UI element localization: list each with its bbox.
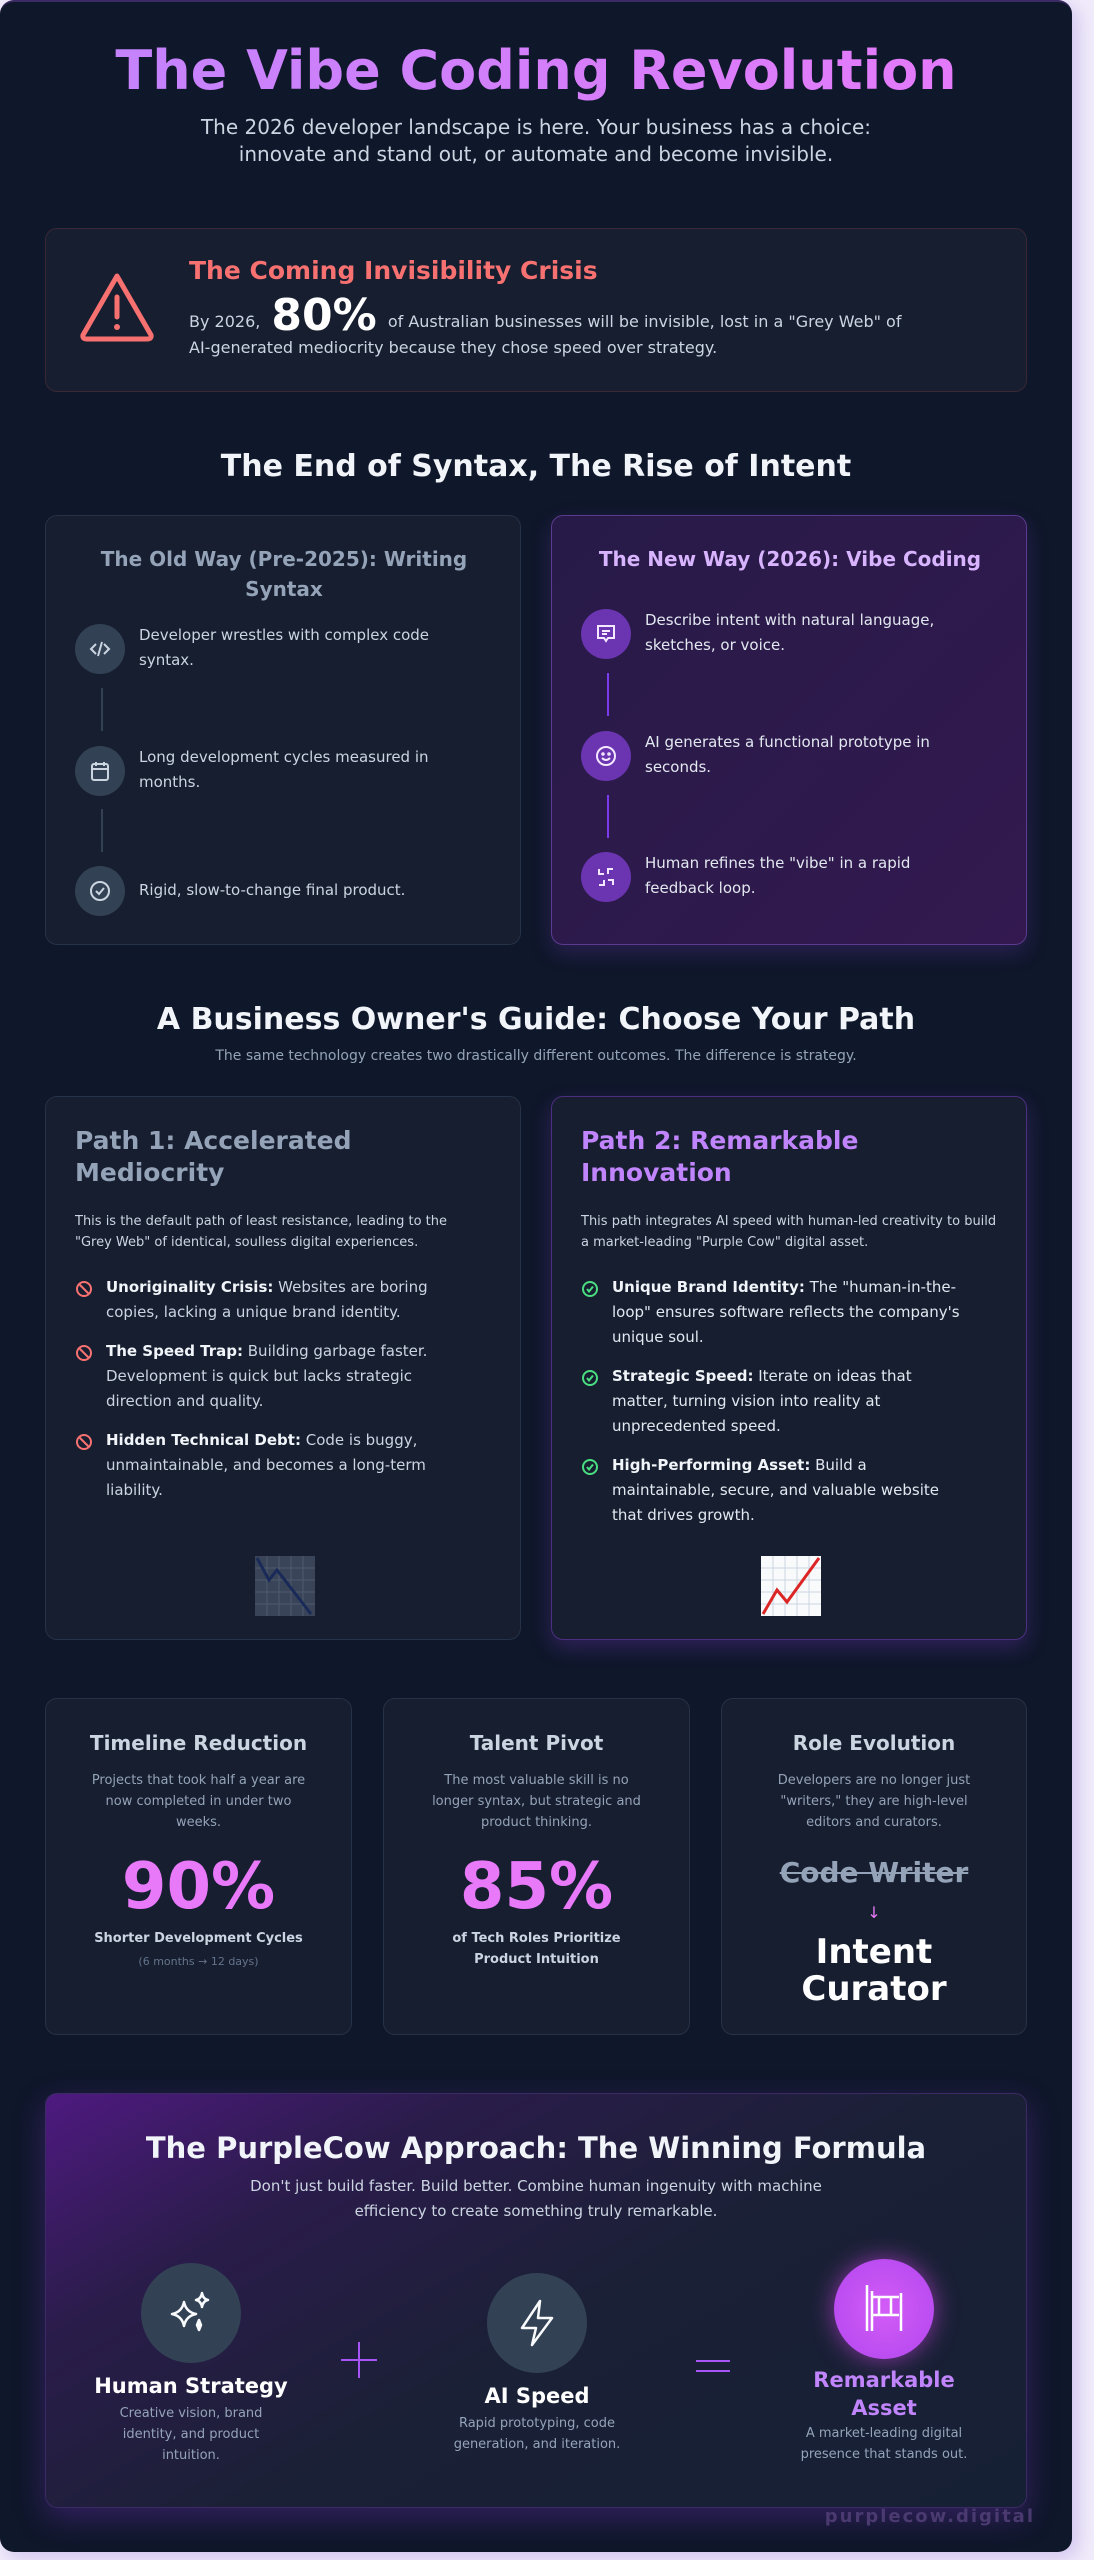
stat card: role evolution: Role Evolution	[793, 1731, 955, 1755]
new way title: The New Way (2026): Vibe Coding	[599, 547, 981, 571]
code writer strikethrough: Code Writer	[780, 1856, 968, 1889]
old way title: The Old Way (Pre-2025): Writing Syntax	[101, 547, 467, 601]
subtitle: innovate and stand out, or automate and become invisible.	[239, 142, 833, 166]
panel: path 1	[45, 1096, 521, 1640]
stat card: timeline reduction	[45, 1698, 352, 2035]
approach subtitle: Don't just build faster. Build better. Combine human ingenuity with machine efficiency to create something truly remarkable.	[250, 2177, 822, 2220]
path 1 title: Path 1: Accelerated	[75, 1126, 352, 1155]
panel: old way	[45, 515, 521, 945]
item: human refines	[581, 852, 910, 902]
path 1 bullets: Unoriginality Crisis: Websites are boring copies, lacking a unique brand identity.	[106, 1278, 428, 1321]
panel: new way	[551, 515, 1027, 945]
path 2 bullets: unprecedented speed.	[612, 1417, 781, 1435]
item: AI generates: AI generates a functional prototype in seconds.	[645, 733, 930, 776]
stat card: timeline reduction: weeks.	[176, 1815, 221, 1830]
crisis text: AI-generated mediocrity because they chose speed over strategy.	[189, 338, 717, 357]
intent curator: Curator	[801, 1969, 947, 2009]
approach title: The PurpleCow Approach: The Winning Formula	[146, 2131, 926, 2165]
path 2 bullets: loop" ensures software reflects the company's	[612, 1303, 960, 1321]
remarkable asset: A market-leading digital presence that stands out.	[801, 2426, 967, 2462]
path 2 bullets: maintainable, secure, and valuable website	[612, 1481, 939, 1499]
stat card: talent pivot: The most valuable skill is no	[444, 1773, 629, 1788]
crisis heading: The Coming Invisibility Crisis	[189, 256, 598, 285]
stat card: talent pivot: product thinking.	[481, 1815, 592, 1830]
big number 90%: 90%	[122, 1850, 275, 1924]
path 2 title	[581, 1126, 858, 1187]
icon: lightning	[487, 2273, 587, 2373]
stat card: role evolution: editors and curators.	[806, 1815, 942, 1830]
crisis text: By 2026, 80% of Australian businesses will be invisible, lost in a "Grey Web" of	[189, 290, 901, 341]
heading: end of syntax: The End of Syntax, The Rise of Intent	[221, 449, 851, 484]
icon: sparkles	[141, 2263, 241, 2363]
path 1 title: Mediocrity	[75, 1158, 224, 1187]
icon: declining chart	[255, 1556, 315, 1616]
stat card: talent pivot: Talent Pivot	[470, 1731, 603, 1755]
remarkable asset	[801, 2244, 967, 2462]
stat card: role evolution: "writers," they are high-level	[780, 1794, 968, 1809]
item: long cycles: Long development cycles measured in months.	[139, 748, 429, 791]
path 1 title	[75, 1126, 352, 1187]
icon: warning triangle	[80, 274, 154, 342]
heading: business guide: A Business Owner's Guide: Choose Your Path	[157, 1002, 915, 1037]
ai speed: Rapid prototyping, code generation, and iteration.	[454, 2416, 620, 2452]
ai speed: AI Speed	[484, 2384, 590, 2408]
title: The Vibe Coding Revolution	[115, 39, 957, 102]
stat card: talent pivot: longer syntax, but strategic and	[432, 1794, 641, 1809]
watermark: purplecow.digital	[825, 2506, 1035, 2527]
subtitle	[200, 115, 871, 166]
panel: purplecow approach	[45, 2093, 1027, 2508]
ai speed	[454, 2273, 620, 2452]
stat card: timeline reduction: Shorter Development Cycles	[94, 1931, 303, 1946]
stat card: talent pivot	[383, 1698, 690, 2035]
path 1 bullets: Hidden Technical Debt: Code is buggy, unmaintainable, and becomes a long-term liability.	[106, 1431, 426, 1499]
path 2 bullets: Strategic Speed: Iterate on ideas that	[612, 1367, 912, 1385]
stat card: timeline reduction: now completed in under two	[106, 1794, 291, 1809]
icon: rising chart	[761, 1556, 821, 1616]
path 2 bullets: High-Performing Asset: Build a	[612, 1456, 867, 1474]
panel: path 2	[551, 1096, 1027, 1640]
human strategy: Human Strategy	[94, 2374, 288, 2398]
path 1 description: This is the default path of least resistance, leading to the "Grey Web" of identical, soulless digital experiences.	[75, 1214, 447, 1250]
item: rigid product: Rigid, slow-to-change final product.	[139, 881, 405, 899]
icon: purple cow	[834, 2259, 934, 2359]
big number 85%: 85%	[460, 1850, 613, 1924]
path 2 bullets: matter, turning vision into reality at	[612, 1392, 880, 1410]
path 2 description: This path integrates AI speed with human-led creativity to build a market-leading "Purple Cow" digital asset.	[581, 1214, 996, 1250]
stat card: timeline reduction: Projects that took half a year are	[92, 1773, 305, 1788]
path 2 bullets: that drives growth.	[612, 1506, 755, 1524]
item: describe intent: Describe intent with natural language, sketches, or voice.	[645, 611, 934, 654]
item: rigid product	[75, 866, 405, 916]
guide subtitle: The same technology creates two drastically different outcomes. The difference is strategy.	[215, 1048, 857, 1064]
stat card: talent pivot: of Tech Roles Prioritize Product Intuition	[452, 1931, 621, 1967]
intent curator	[801, 1932, 947, 2009]
path 1 bullets	[76, 1278, 428, 1499]
stat card: timeline reduction: (6 months → 12 days)	[138, 1955, 259, 1968]
stat card: role evolution: Developers are no longer just	[778, 1773, 970, 1788]
path 2 title: Innovation	[581, 1158, 732, 1187]
path 1 bullets: The Speed Trap: Building garbage faster. Development is quick but lacks strategic direction and quality.	[106, 1342, 427, 1410]
human strategy: Creative vision, brand identity, and product intuition.	[120, 2406, 262, 2463]
path 2 title: Path 2: Remarkable	[581, 1126, 858, 1155]
path 2 bullets: Unique Brand Identity: The "human-in-the-	[612, 1278, 956, 1296]
arrow down: ↓	[867, 1903, 881, 1922]
item: code syntax: Developer wrestles with complex code syntax.	[139, 626, 429, 669]
panel: invisibility crisis	[45, 228, 1027, 392]
equals sign	[696, 2360, 730, 2372]
path 2 bullets	[582, 1278, 960, 1524]
human strategy	[94, 2263, 288, 2463]
plus sign	[341, 2342, 377, 2378]
stat card: role evolution	[721, 1698, 1027, 2035]
subtitle: The 2026 developer landscape is here. Your business has a choice:	[201, 115, 871, 139]
path 2 bullets: unique soul.	[612, 1328, 704, 1346]
stat card: timeline reduction: Timeline Reduction	[90, 1731, 307, 1755]
item: human refines: Human refines the "vibe" in a rapid feedback loop.	[645, 854, 910, 897]
remarkable asset: Remarkable Asset	[813, 2368, 955, 2420]
intent curator: Intent	[816, 1932, 932, 1972]
